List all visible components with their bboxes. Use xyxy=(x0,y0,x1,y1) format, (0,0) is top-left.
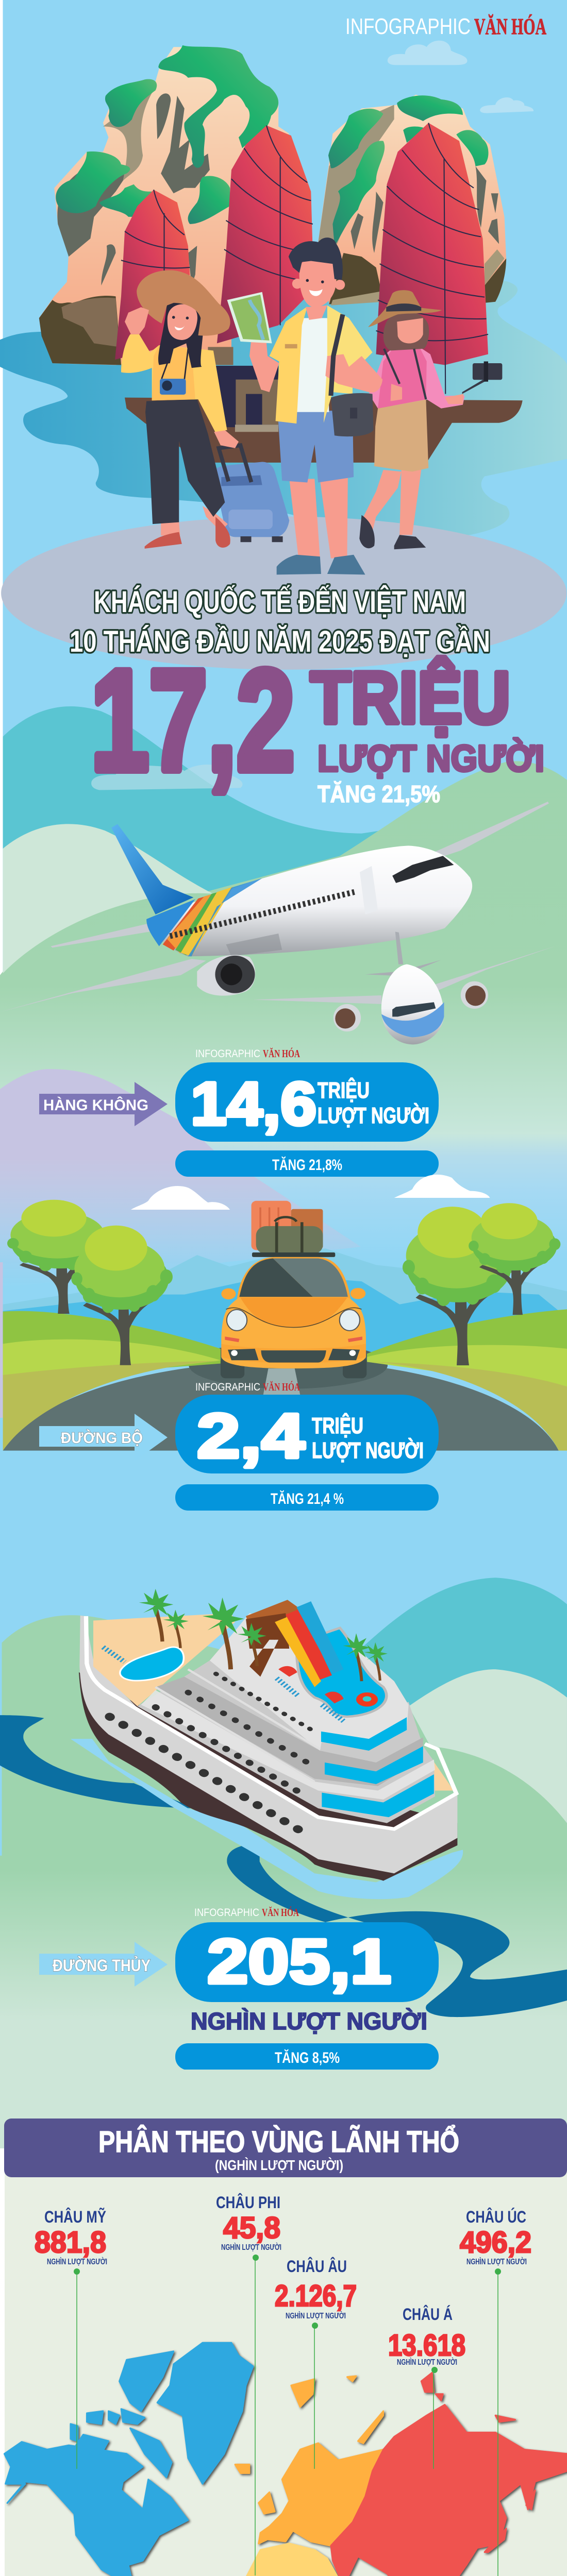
callout: Europe: CHÂU ÂU xyxy=(287,2257,347,2276)
big number 17,2 million xyxy=(91,640,544,800)
big number 17,2 million: TRIỆU xyxy=(310,657,510,739)
right karst rock xyxy=(318,95,506,306)
arrow label: Đường thủy: ĐƯỜNG THỦY xyxy=(53,1956,151,1975)
panel: hero scene with karst islands and junk boat xyxy=(0,41,567,670)
callout: Africa: NGHÌN LƯỢT NGƯỜI xyxy=(221,2242,281,2252)
callout: Europe xyxy=(275,2257,357,2469)
heading: by territory: PHÂN THEO VÙNG LÃNH THỔ xyxy=(98,2125,459,2159)
callout: Australia: 496,2 xyxy=(460,2226,531,2259)
callout: America: CHÂU MỸ xyxy=(44,2208,106,2226)
title: headline xyxy=(70,585,490,658)
lavender hill xyxy=(0,1069,361,1288)
callout: Asia: NGHÌN LƯỢT NGƯỜI xyxy=(397,2357,457,2367)
water xyxy=(0,275,567,538)
increase 21,5%: TĂNG 21,5% xyxy=(318,781,440,807)
pill: sea increase 8,5% xyxy=(175,2043,439,2070)
arrow label: Hàng không xyxy=(39,1082,168,1126)
icon: car with luggage xyxy=(221,1201,366,1378)
woman with selfie stick xyxy=(359,290,502,549)
arrow label: Đường bộ xyxy=(39,1414,168,1461)
icon: big airplane xyxy=(0,802,549,1012)
logo: small xyxy=(195,1047,301,1060)
logo: Infographic Văn Hóa header: INFOGRAPHIC xyxy=(345,14,471,39)
river xyxy=(0,1715,195,1808)
palms xyxy=(139,1589,173,1641)
left karst rock xyxy=(39,45,289,365)
callout: Asia: 13.618 xyxy=(388,2329,465,2362)
world map xyxy=(4,2343,567,2576)
callout: America: 881,8 xyxy=(35,2226,106,2259)
logo: small sea: VĂN HÓA xyxy=(262,1906,299,1919)
heading: by territory xyxy=(4,2119,567,2177)
title: headline: KHÁCH QUỐC TẾ ĐẾN VIỆT NAM xyxy=(94,585,466,619)
pill: sea 205,1: 205,1 xyxy=(207,1926,391,1996)
ground xyxy=(1,516,566,670)
arrow label: Đường thủy xyxy=(39,1942,168,1987)
road xyxy=(3,1360,559,1451)
big number 17,2 million: LƯỢT NGƯỜI xyxy=(318,738,544,779)
logo: small sea: INFOGRAPHIC xyxy=(194,1907,259,1919)
heading: by territory: (NGHÌN LƯỢT NGƯỜI) xyxy=(215,2157,343,2173)
pill: road 2,4 million: TRIỆU xyxy=(312,1413,363,1438)
pill: road 2,4 million: LƯỢT NGƯỜI xyxy=(312,1437,424,1463)
pill: road increase 21,4%: TĂNG 21,4 % xyxy=(271,1490,344,1507)
panel: sea scene hills and river xyxy=(0,1578,567,2122)
callout: Africa xyxy=(216,2193,281,2575)
callout: Australia: CHÂU ÚC xyxy=(466,2208,526,2226)
sea unit label: NGHÌN LƯỢT NGƯỜI xyxy=(191,2008,427,2035)
callout: America xyxy=(35,2208,107,2469)
airplanes xyxy=(0,802,555,1044)
icon: small airplane front xyxy=(253,932,555,1044)
callout: America: NGHÌN LƯỢT NGƯỜI xyxy=(47,2257,107,2266)
pill: air 14,6 million: LƯỢT NGƯỜI xyxy=(318,1103,429,1128)
woman with camera and suitcase xyxy=(121,270,289,549)
pill: sea 205,1 xyxy=(175,1922,439,2002)
panel: hills behind headline and airplanes xyxy=(0,706,567,1135)
man with map and bag xyxy=(227,238,382,574)
logo: small road: INFOGRAPHIC xyxy=(195,1381,260,1393)
mountains xyxy=(3,1248,567,1344)
grass hills xyxy=(3,1311,221,1380)
pools and slides xyxy=(120,1647,184,1681)
callout: Europe: 2.126,7 xyxy=(275,2279,357,2313)
callout: Australia: NGHÌN LƯỢT NGƯỜI xyxy=(466,2257,527,2266)
arrow label: Đường bộ: ĐƯỜNG BỘ xyxy=(61,1429,143,1447)
pill: air 14,6 million: 14,6 xyxy=(191,1070,316,1138)
pill: air 14,6 million: TRIỆU xyxy=(318,1077,370,1103)
panel: road scene xyxy=(3,1175,567,1451)
logo: small road xyxy=(195,1381,301,1393)
logo: small: INFOGRAPHIC xyxy=(195,1048,260,1060)
callout: Africa: CHÂU PHI xyxy=(216,2193,280,2212)
callout: Australia xyxy=(460,2208,531,2576)
clouds xyxy=(131,1175,490,1210)
pill: road 2,4 million xyxy=(175,1395,439,1473)
logo: small sea xyxy=(194,1906,299,1919)
big number 17,2 million: 17,2 xyxy=(91,640,295,800)
callout: Asia: CHÂU Á xyxy=(403,2305,453,2324)
pill: sea increase 8,5%: TĂNG 8,5% xyxy=(275,2049,340,2066)
pill: road increase 21,4% xyxy=(175,1484,439,1511)
arrow label: Hàng không: HÀNG KHÔNG xyxy=(43,1096,148,1114)
logo: small: VĂN HÓA xyxy=(263,1047,301,1060)
pill: road 2,4 million: 2,4 xyxy=(197,1401,305,1471)
callout: Africa: 45,8 xyxy=(223,2211,280,2245)
trees xyxy=(7,1200,560,1365)
panel: sky gradient behind road scene xyxy=(0,1133,567,1262)
pill: air increase 21,8% xyxy=(175,1150,439,1177)
logo: small road: VĂN HÓA xyxy=(263,1381,301,1393)
junk boat with sails xyxy=(115,123,523,463)
callout: Asia xyxy=(388,2305,465,2469)
tourists trio xyxy=(121,238,502,574)
clouds xyxy=(388,41,533,113)
callout: Europe: NGHÌN LƯỢT NGƯỜI xyxy=(286,2311,346,2320)
icon: cruise ship xyxy=(71,1589,463,1899)
pill: air increase 21,8%: TĂNG 21,8% xyxy=(272,1156,342,1174)
panel: world map region xyxy=(0,2119,567,2576)
pill: air 14,6 million xyxy=(175,1062,439,1142)
